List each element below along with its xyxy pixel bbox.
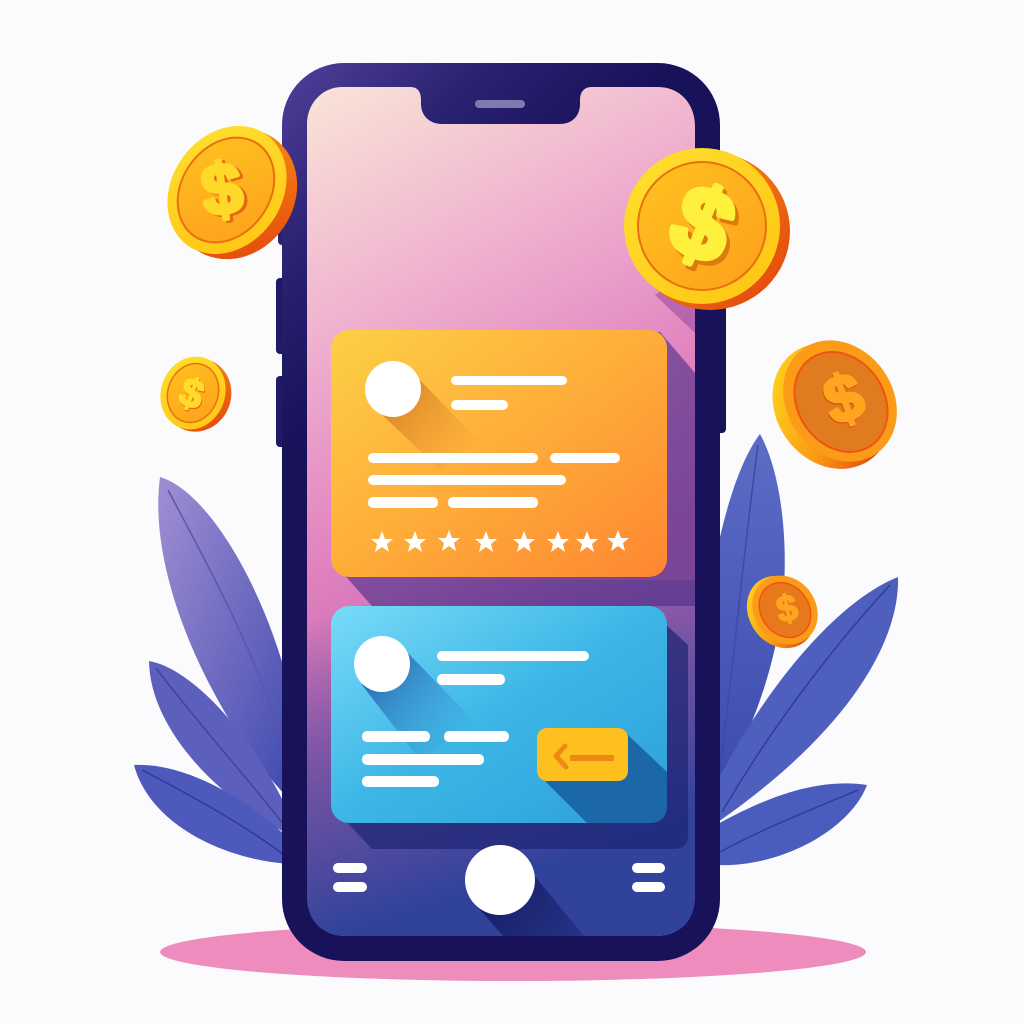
avatar: [365, 361, 478, 470]
phone body: [276, 63, 726, 961]
menu icon left: [333, 863, 367, 892]
bottom navigation: [333, 845, 665, 936]
button with arrow: [537, 728, 628, 781]
coin: top left: $: [200, 149, 251, 234]
button shadow: [545, 735, 667, 823]
coin: small left: $: [174, 369, 210, 418]
avatar: [354, 636, 410, 692]
right leaves: [715, 434, 898, 865]
side buttons: [276, 278, 288, 354]
text lines: [362, 651, 589, 787]
ground ellipse: [160, 923, 866, 981]
coin: top left: $: [197, 148, 247, 232]
star rating: [371, 530, 629, 552]
text lines: [368, 376, 620, 508]
leaf: upper left: [158, 477, 290, 800]
leaf: lower left: [134, 765, 290, 864]
coin: small right orange: $: [773, 586, 802, 631]
frame: [282, 63, 720, 961]
leaf: tall right: [715, 434, 785, 790]
coin: top left: [143, 103, 322, 284]
card shadows: [340, 332, 695, 849]
coin: right orange: [748, 318, 920, 492]
coin shadow on screen: [655, 285, 695, 333]
coin: top right: [624, 148, 790, 310]
screen lower shade: [307, 580, 695, 936]
card: orange review: [331, 330, 667, 577]
coin: top right: $: [656, 162, 750, 286]
home button: [465, 845, 535, 915]
screen: [307, 87, 695, 936]
leaf: wide right: [718, 577, 898, 822]
card: blue offer: [331, 606, 667, 823]
coin: right orange: $: [814, 358, 872, 440]
left leaves: [134, 477, 290, 864]
leaf: low right: [716, 783, 867, 865]
home button shadow: [476, 868, 584, 936]
coin: small right orange: [733, 563, 831, 661]
menu icon right: [632, 863, 665, 892]
avatar shadow: [362, 647, 475, 760]
coin: right orange: $: [815, 357, 873, 439]
speaker: [475, 100, 525, 108]
coin: small left: [150, 347, 242, 441]
coin: small left: $: [174, 371, 210, 420]
leaf: middle left: [149, 661, 290, 835]
coin: top right: $: [659, 166, 753, 291]
